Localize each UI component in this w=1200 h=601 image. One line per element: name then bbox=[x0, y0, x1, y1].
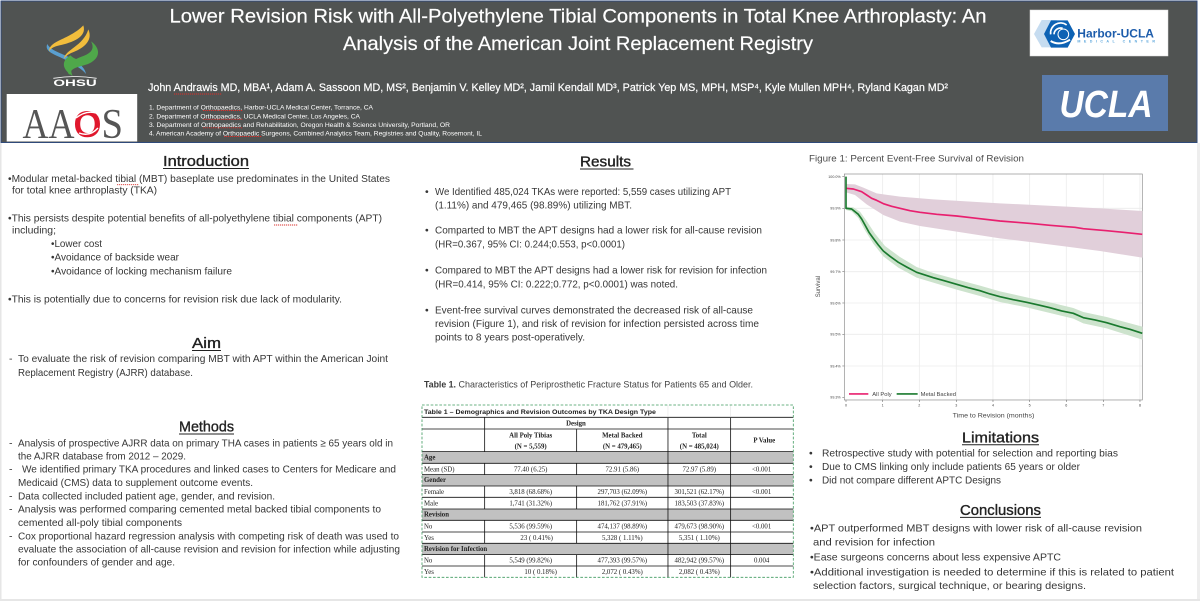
text block: methods list: the AJRR database from 2012 – 2029. bbox=[18, 450, 186, 462]
text block: results bullets: points to 8 years post-operatively. bbox=[435, 331, 585, 343]
table: demographics and revision outcomes: (N = 5,559) bbox=[515, 444, 547, 451]
title bbox=[170, 6, 986, 55]
text block: introduction bullets: •Lower cost bbox=[51, 238, 102, 250]
logo: AAOS: AA bbox=[22, 102, 75, 148]
line: metal backed bbox=[846, 177, 1142, 333]
affiliations bbox=[149, 104, 482, 137]
x axis labels: 4 bbox=[992, 403, 994, 407]
x axis labels bbox=[845, 403, 1141, 419]
text block: results bullets: Compared to MBT the APT designs had a lower risk for revision for infection bbox=[435, 264, 767, 276]
text block: limitations bullets bbox=[809, 448, 1118, 486]
text block: limitations bullets: • bbox=[809, 474, 813, 486]
logo: UCLA bbox=[1042, 75, 1168, 131]
text block: conclusions bullets: •Additional investigation is needed to determine if this is related to patient bbox=[810, 567, 1174, 579]
text block: methods list: Medicaid (CMS) data to supplement outcome events. bbox=[18, 477, 253, 489]
table caption: Characteristics of Periprosthetic Fracture Status for Patients 65 and Older. bbox=[458, 380, 753, 390]
table: demographics and revision outcomes: 3,818 (68.68%) bbox=[509, 489, 552, 496]
text block: methods list: for confounders of gender and age. bbox=[18, 557, 175, 569]
y axis labels: 99.7% bbox=[830, 270, 841, 274]
text block: aim statement: Replacement Registry (AJRR) database. bbox=[18, 367, 193, 379]
heading: limitations: Limitations bbox=[962, 430, 1039, 446]
logo: Harbor-UCLA: MEDICAL CENTER bbox=[1077, 40, 1155, 44]
table: demographics and revision outcomes: 2,082 ( 0.43%) bbox=[679, 569, 720, 576]
table: demographics and revision outcomes: 301,521 (62.17%) bbox=[675, 489, 724, 496]
y axis labels: 99.6% bbox=[830, 301, 841, 305]
text block: results bullets: • bbox=[425, 264, 429, 276]
text block: results bullets: (HR=0.367, 95% CI: 0.244;0.553, p<0.0001) bbox=[435, 239, 625, 251]
x axis labels: 5 bbox=[1029, 403, 1031, 407]
logo: Harbor-UCLA bbox=[1030, 10, 1168, 56]
panel: methods bbox=[9, 420, 400, 569]
text block: methods list: - bbox=[9, 464, 13, 476]
band: metal backed confidence interval bbox=[846, 207, 1142, 340]
logo: AAOS: O bbox=[74, 104, 102, 145]
table: demographics and revision outcomes: 181,762 (37.91%) bbox=[598, 500, 647, 507]
x axis labels: 1 bbox=[882, 403, 884, 407]
heading: results: Results bbox=[580, 155, 631, 171]
y axis labels: 99.9% bbox=[830, 207, 841, 211]
table: demographics and revision outcomes: Table 1 – Demographics and Revision Outcomes by TKA Design Type bbox=[424, 409, 656, 416]
table: demographics and revision outcomes: Male bbox=[424, 500, 438, 507]
text block: methods list: cemented all-poly tibial components bbox=[18, 517, 182, 529]
text block: methods list: Data collected included patient age, gender, and revision. bbox=[18, 490, 275, 502]
text block: introduction bullets: •This persists despite potential benefits of all-polyethylene tibial components (APT) bbox=[8, 213, 382, 225]
x axis labels: 8 bbox=[1139, 403, 1141, 407]
y axis labels bbox=[816, 175, 841, 400]
text block: conclusions bullets: •APT outperformed MBT designs with lower risk of all-cause revision bbox=[810, 523, 1142, 535]
logo: Harbor-UCLA: Harbor-UCLA bbox=[1077, 27, 1155, 40]
text block: methods list: Analysis was performed comparing cemented metal backed tibial components to bbox=[18, 504, 381, 516]
table: demographics and revision outcomes: Yes bbox=[424, 569, 434, 576]
text block: methods list: - bbox=[9, 438, 13, 450]
x axis labels: 7 bbox=[1102, 403, 1104, 407]
table: demographics and revision outcomes: 5,536 (99.59%) bbox=[509, 523, 552, 530]
text block: introduction bullets: •Modular metal-backed tibial (MBT) baseplate use predominates in the United States bbox=[8, 173, 390, 185]
text block: methods list: We identified primary TKA procedures and linked cases to Centers for Medicare and bbox=[22, 464, 396, 476]
table: demographics and revision outcomes: No bbox=[424, 523, 433, 530]
affiliations: 2. Department of Orthopaedics, UCLA Medical Center, Los Angeles, CA bbox=[149, 113, 360, 120]
chart: survival curves bbox=[816, 174, 1142, 419]
y axis labels: 99.4% bbox=[830, 364, 841, 368]
text block: results bullets: We Identified 485,024 TKAs were reported: 5,559 cases utilizing APT bbox=[435, 186, 732, 198]
title: Lower Revision Risk with All-Polyethylene Tibial Components in Total Knee Arthroplasty: An bbox=[170, 6, 986, 28]
affiliations: 1. Department of Orthopaedics, Harbor-UCLA Medical Center, Torrance, CA bbox=[149, 104, 373, 111]
text block: conclusions bullets bbox=[810, 523, 1174, 592]
table: demographics and revision outcomes: 5,351 ( 1.10%) bbox=[679, 535, 720, 542]
legend bbox=[849, 392, 956, 398]
table: demographics and revision outcomes: (N = 479,465) bbox=[603, 444, 642, 451]
text block: aim statement: - bbox=[9, 353, 13, 365]
table: demographics and revision outcomes: 5,549 (99.82%) bbox=[509, 558, 552, 565]
heading: methods: Methods bbox=[179, 420, 234, 436]
x axis labels: 0 bbox=[845, 403, 847, 407]
panel: figure 1 bbox=[809, 154, 1142, 419]
heading: aim: Aim bbox=[192, 336, 221, 352]
table: demographics and revision outcomes: 479,673 (98.90%) bbox=[675, 523, 724, 530]
text block: results bullets: • bbox=[425, 224, 429, 236]
table: demographics and revision outcomes: <0.001 bbox=[752, 523, 771, 530]
logo: OHSU: OHSU bbox=[53, 78, 97, 88]
table: demographics and revision outcomes: 5,328 ( 1.11%) bbox=[602, 535, 643, 542]
table: demographics and revision outcomes: 23 ( 0.41%) bbox=[520, 535, 553, 542]
panel: results bbox=[422, 155, 793, 577]
affiliations: 4. American Academy of Orthopaedic Surgeons, Combined Analytics Team, Registries and Quality, Rosemont, IL bbox=[149, 130, 482, 137]
text block: results bullets: Event-free survival curves demonstrated the decreased risk of all-cause bbox=[435, 304, 753, 316]
text block: methods list: evaluate the association of all-cause revision and revision for infection while adjusting bbox=[18, 544, 400, 556]
y axis labels: 100.0% bbox=[828, 175, 841, 179]
text block: methods list: - bbox=[9, 530, 13, 542]
table: demographics and revision outcomes: Mean (SD) bbox=[424, 466, 455, 473]
table: demographics and revision outcomes bbox=[422, 405, 793, 577]
logo: AAOS bbox=[7, 94, 137, 148]
text block: results bullets: • bbox=[425, 304, 429, 316]
table: demographics and revision outcomes: 72.97 (5.89) bbox=[683, 466, 716, 473]
x axis labels: 3 bbox=[955, 403, 957, 407]
table: demographics and revision outcomes: Age bbox=[424, 454, 435, 461]
text block: results bullets: revision (Figure 1), and risk of revision for infection persisted across time bbox=[435, 318, 759, 330]
affiliations: 3. Department of Orthopaedics and Rehabilitation, Oregon Health & Science University, Portland, OR bbox=[149, 122, 450, 129]
y axis labels: 99.5% bbox=[830, 333, 841, 337]
panel: aim bbox=[9, 336, 388, 379]
table: demographics and revision outcomes: Revision for Infection bbox=[424, 546, 487, 553]
legend: Metal Backed bbox=[921, 392, 956, 398]
text block: conclusions bullets: and revision for infection bbox=[813, 536, 935, 548]
text block: limitations bullets: • bbox=[809, 461, 813, 473]
text block: methods list: - bbox=[9, 504, 13, 516]
table: demographics and revision outcomes: 10 ( 0.18%) bbox=[524, 569, 557, 576]
text block: results bullets: (1.11%) and 479,465 (98.89%) utilizing MBT. bbox=[435, 200, 632, 212]
table: demographics and revision outcomes: Design bbox=[566, 421, 586, 428]
line: all poly bbox=[846, 188, 1142, 234]
table: demographics and revision outcomes: Metal Backed bbox=[602, 432, 643, 439]
legend: All Poly bbox=[872, 392, 892, 398]
table: demographics and revision outcomes: Female bbox=[424, 489, 444, 496]
text block: introduction bullets: •Avoidance of backside wear bbox=[51, 252, 179, 264]
text block: methods list bbox=[9, 438, 400, 569]
authors: John Andrawis MD, MBA¹, Adam A. Sassoon MD, MS², Benjamin V. Kelley MD², Jamil Kendall MD³, Patrick Yep MS, MPH, MSP⁴, Kyle Mullen MPH⁴, Ryland Kagan MD² bbox=[148, 82, 948, 94]
table: demographics and revision outcomes: 474,137 (98.89%) bbox=[598, 523, 647, 530]
panel: conclusions bbox=[810, 503, 1174, 592]
text block: introduction bullets: •This is potentially due to concerns for revision risk due lack of modularity. bbox=[8, 294, 342, 306]
text block: results bullets: • bbox=[425, 186, 429, 198]
text block: introduction bullets: including; bbox=[12, 224, 56, 236]
heading: introduction: Introduction bbox=[163, 154, 249, 170]
table: demographics and revision outcomes: 477,393 (99.57%) bbox=[598, 558, 647, 565]
panel: limitations bbox=[809, 430, 1118, 486]
text block: methods list: Cox proportional hazard regression analysis with competing risk of death was used to bbox=[18, 530, 399, 542]
table: demographics and revision outcomes: 0.004 bbox=[754, 558, 770, 565]
table: demographics and revision outcomes: No bbox=[424, 558, 433, 565]
text block: aim statement bbox=[9, 353, 388, 379]
text block: introduction bullets bbox=[8, 173, 390, 306]
logo: OHSU bbox=[47, 25, 98, 88]
text block: conclusions bullets: selection factors, surgical technique, or bearing designs. bbox=[813, 580, 1086, 592]
y axis labels: Survival bbox=[816, 276, 822, 297]
text block: limitations bullets: • bbox=[809, 448, 813, 460]
table: demographics and revision outcomes: 1,741 (31.32%) bbox=[509, 500, 552, 507]
table: demographics and revision outcomes: 77.40 (6.25) bbox=[514, 466, 547, 473]
text block: methods list: - bbox=[9, 490, 13, 502]
text block: results bullets bbox=[425, 186, 767, 343]
table: demographics and revision outcomes: Total bbox=[692, 432, 707, 439]
table caption: Table 1. bbox=[424, 380, 456, 390]
text block: methods list: Analysis of prospective AJRR data on primary THA cases in patients ≥ 65 years old in bbox=[18, 438, 393, 450]
y axis labels: 99.8% bbox=[830, 238, 841, 242]
text block: conclusions bullets: •Ease surgeons concerns about less expensive APTC bbox=[810, 552, 1061, 564]
text block: introduction bullets: for total knee arthroplasty (TKA) bbox=[12, 184, 157, 196]
y axis labels: 99.3% bbox=[830, 396, 841, 400]
table: demographics and revision outcomes: 482,942 (99.57%) bbox=[675, 558, 724, 565]
figure caption: Figure 1: Percent Event-Free Survival of Revision bbox=[809, 154, 1024, 165]
x axis labels: Time to Revision (months) bbox=[953, 413, 1034, 419]
heading: conclusions: Conclusions bbox=[960, 503, 1041, 519]
text block: limitations bullets: Retrospective study with potential for selection and reporting bias bbox=[822, 448, 1118, 460]
table: demographics and revision outcomes: 72.91 (5.86) bbox=[606, 466, 639, 473]
table: demographics and revision outcomes: <0.001 bbox=[752, 489, 771, 496]
text block: aim statement: To evaluate the risk of revision comparing MBT with APT within the American Joint bbox=[18, 353, 388, 365]
table: demographics and revision outcomes: 2,072 ( 0.43%) bbox=[602, 569, 643, 576]
text block: results bullets: Comparted to MBT the APT designs had a lower risk for all-cause revision bbox=[435, 224, 762, 236]
table: demographics and revision outcomes: (N = 485,024) bbox=[680, 444, 719, 451]
header banner bbox=[1, 1, 1197, 148]
x axis labels: 2 bbox=[918, 403, 920, 407]
title: Analysis of the American Joint Replacement Registry bbox=[343, 33, 813, 55]
table: demographics and revision outcomes: Revision bbox=[424, 512, 449, 519]
table: demographics and revision outcomes: Gender bbox=[424, 477, 446, 484]
text block: limitations bullets: Due to CMS linking only include patients 65 years or older bbox=[822, 461, 1080, 473]
text block: limitations bullets: Did not compare different APTC Designs bbox=[822, 474, 1001, 486]
panel: introduction bbox=[8, 154, 390, 306]
band: all poly confidence interval bbox=[846, 184, 1142, 258]
table: demographics and revision outcomes: <0.001 bbox=[752, 466, 771, 473]
text block: introduction bullets: •Avoidance of locking mechanism failure bbox=[51, 265, 232, 277]
table: demographics and revision outcomes: P Value bbox=[753, 438, 775, 445]
table: demographics and revision outcomes: 183,503 (37.83%) bbox=[675, 500, 724, 507]
text block: results bullets: (HR=0.414, 95% CI: 0.222;0.772, p<0.0001) was noted. bbox=[435, 278, 678, 290]
logo: UCLA: UCLA bbox=[1060, 84, 1152, 126]
table: demographics and revision outcomes: Yes bbox=[424, 535, 434, 542]
x axis labels: 6 bbox=[1065, 403, 1067, 407]
table: demographics and revision outcomes: 297,703 (62.09%) bbox=[598, 489, 647, 496]
logo: AAOS: S bbox=[102, 102, 123, 148]
table: demographics and revision outcomes: All Poly Tibias bbox=[509, 432, 552, 439]
